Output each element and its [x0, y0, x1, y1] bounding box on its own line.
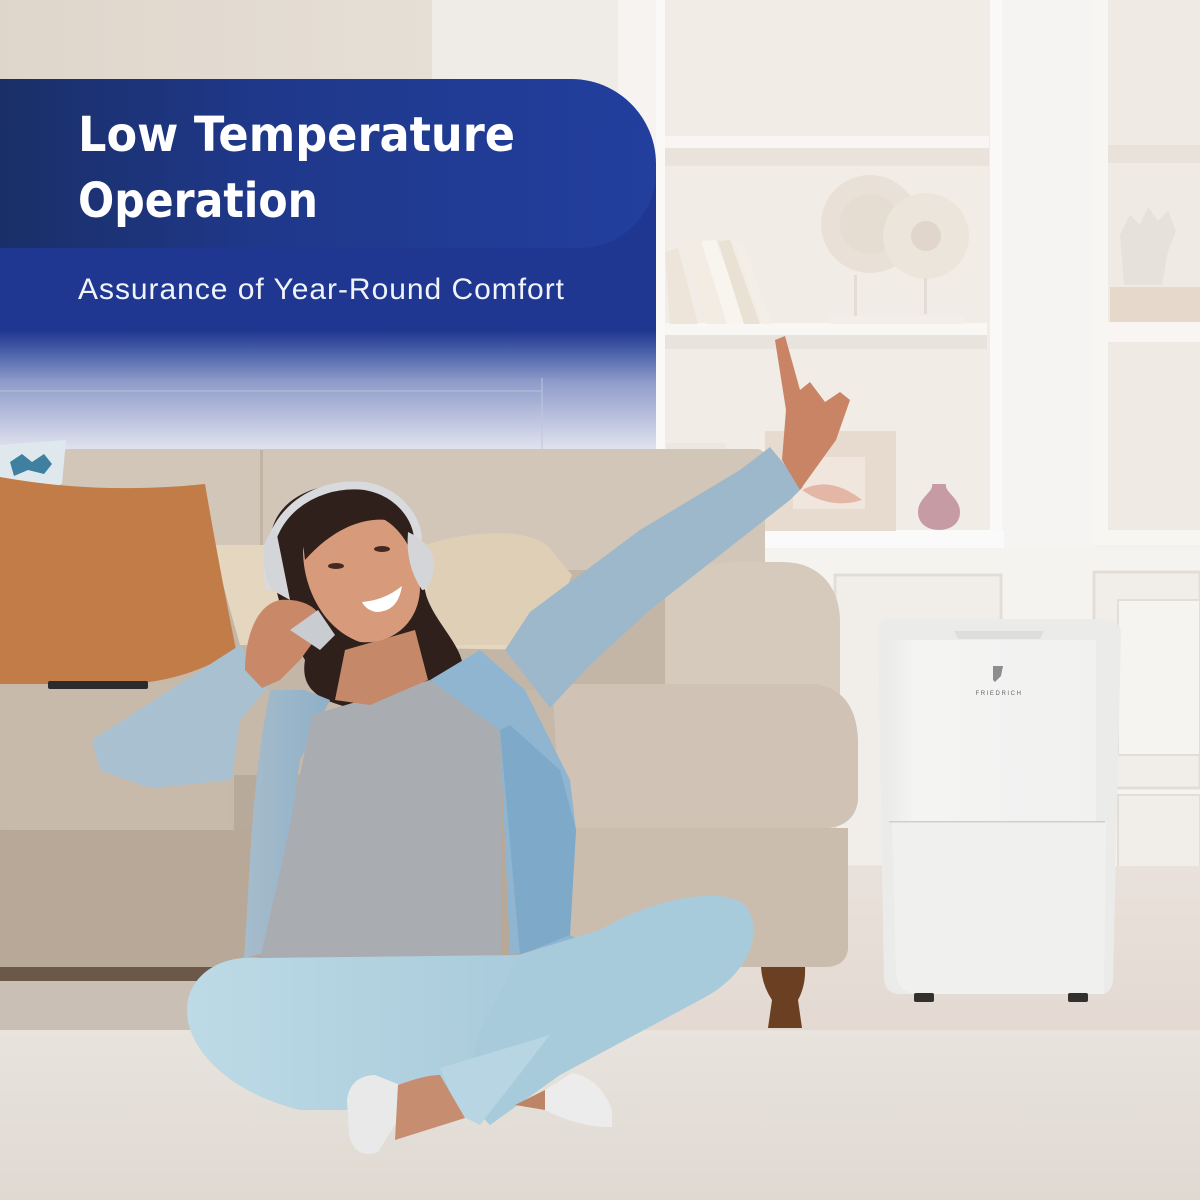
back hair [271, 484, 463, 708]
wainscot panels [760, 548, 1200, 868]
wheels [914, 993, 934, 1002]
logo [975, 666, 1023, 697]
jeans near leg [187, 955, 520, 1110]
raised arm sleeve [505, 447, 803, 708]
shelf decor: coral discs [821, 175, 969, 324]
sofa [0, 440, 858, 1031]
feet [347, 1075, 400, 1154]
cushions [0, 440, 572, 684]
shelf books [665, 240, 772, 324]
bookshelf left unit [656, 0, 1004, 548]
shelf decor: picture frame and vase [765, 431, 960, 531]
headphones [264, 485, 434, 600]
blue header panel [0, 79, 656, 451]
jeans far leg [420, 896, 754, 1125]
subtitle: Assurance of Year-Round Comfort [78, 273, 565, 306]
rug [0, 1030, 1200, 1200]
phone [290, 610, 335, 650]
title second line: Operation [78, 173, 318, 229]
open shirt right panel [430, 650, 580, 955]
neck [335, 630, 428, 705]
lowered arm sleeve [92, 645, 270, 788]
raised hand [775, 336, 850, 490]
dehumidifier [878, 619, 1121, 1002]
tee [258, 680, 502, 968]
floor [560, 866, 1200, 1036]
hand on head [245, 600, 322, 688]
sofa leg [761, 967, 805, 1028]
face [303, 514, 420, 642]
shirt open left panel [244, 690, 330, 958]
bookshelf right unit [1092, 0, 1200, 545]
logo: FRIEDRICH [975, 691, 1023, 697]
title: Low Temperature [78, 107, 515, 163]
person [92, 336, 850, 1154]
